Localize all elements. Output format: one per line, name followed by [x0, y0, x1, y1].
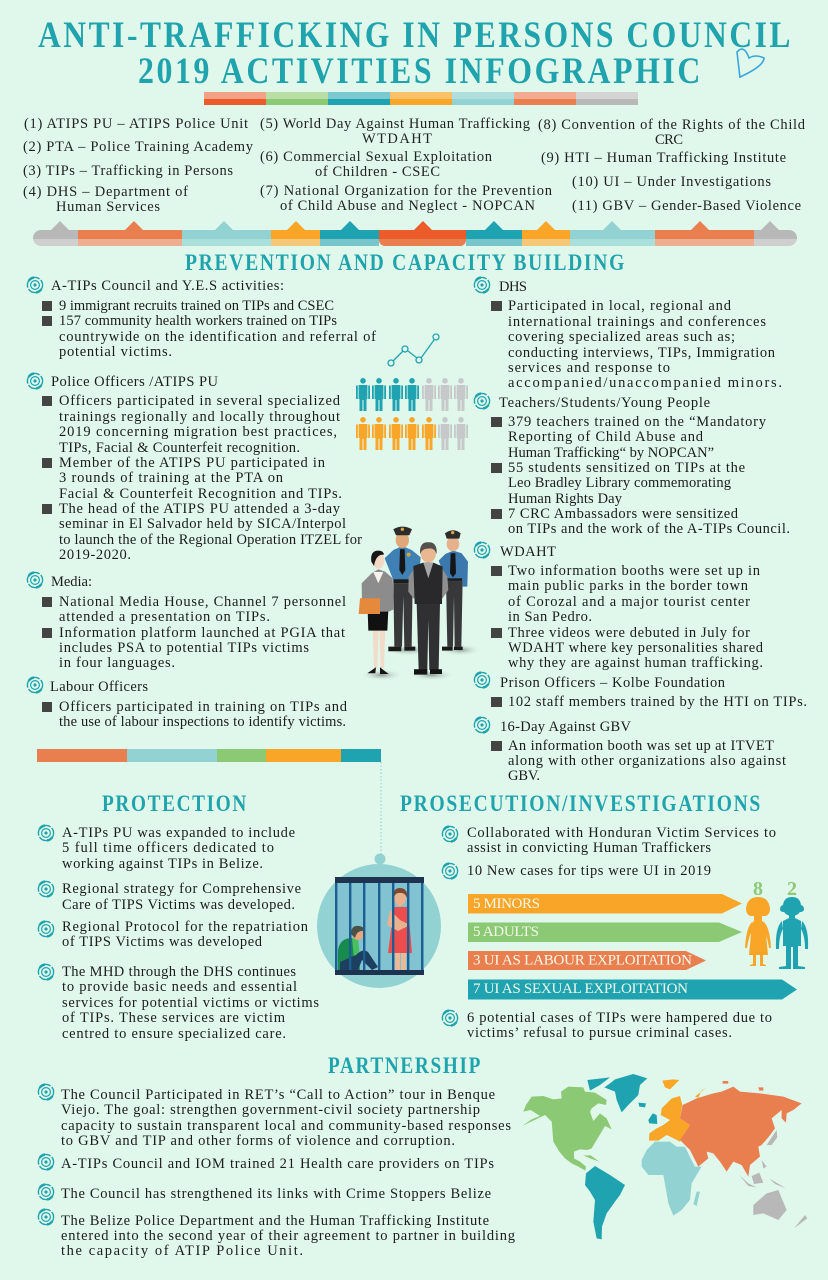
- block: WDAHT: Three videos were debuted in July for: [508, 625, 750, 641]
- arrow: 5 adults: 5 ADULTS: [473, 924, 539, 940]
- block: WDAHT: main public parks in the border town: [508, 578, 749, 594]
- asia: [680, 1081, 802, 1177]
- arrow: 5 adults: [468, 922, 742, 942]
- panel: prosecution/investigations: [442, 825, 808, 1041]
- block: Police Officers: Facial & Counterfeit Recognition and TIPs.: [59, 486, 342, 502]
- officer right: [446, 580, 463, 647]
- panel: partnership: the capacity of ATIP Police Unit.: [61, 1243, 303, 1259]
- panel: prosecution/investigations: assist in convicting Human Traffickers: [467, 840, 711, 856]
- block: Labour Officers: Labour Officers: [50, 679, 148, 695]
- sitting boy: [338, 938, 360, 970]
- block: Police Officers: 2019-2020.: [59, 547, 131, 563]
- panel: prosecution/investigations: Collaborated with Honduran Victim Services to: [467, 825, 776, 841]
- panel: protection: [38, 825, 319, 1042]
- world map: [522, 1074, 807, 1239]
- panel: prevention right column: [474, 277, 807, 784]
- title colour bar: [204, 92, 638, 105]
- block: 16-Day Against GBV: 16-Day Against GBV: [500, 719, 632, 735]
- panel: protection: Regional Protocol for the repatriation: [62, 919, 309, 935]
- panel: partnership: entered into the second year of their agreement to partner in building: [61, 1228, 515, 1244]
- block: Media: includes PSA to potential TIPs victims: [59, 640, 309, 656]
- block: Police Officers: 2019 concerning migration best practices,: [59, 424, 337, 440]
- africa: [642, 1142, 702, 1216]
- panel: partnership: The Council Participated in RET’s “Call to Action” tour in Benque: [61, 1087, 495, 1103]
- cage: [335, 882, 423, 970]
- abbreviations list: of Children - CSEC: [315, 164, 440, 180]
- abbreviations list: of Child Abuse and Neglect - NOPCAN: [280, 198, 536, 214]
- block: Labour Officers: [27, 677, 348, 730]
- europe: [649, 1079, 707, 1142]
- block: 16-Day Against GBV: [474, 717, 786, 784]
- panel: protection: services for potential victims or victims: [62, 995, 319, 1011]
- block: Prison Officers: [474, 672, 807, 710]
- block: Media: attended a presentation on TIPs.: [59, 609, 270, 625]
- block: A-TIPs Council: 9 immigrant recruits trained on TIPs and CSEC: [59, 298, 334, 314]
- abbreviations list: WTDAHT: [362, 131, 432, 147]
- panel: protection: centred to ensure specialized care.: [62, 1026, 286, 1042]
- standing woman: [395, 950, 406, 970]
- heading: partnership: PARTNERSHIP: [328, 1053, 482, 1078]
- block: Police Officers: Police Officers /ATIPS PU: [51, 374, 219, 390]
- block: Teachers/Students/Young People: on TIPs and the work of the A-TIPs Council.: [508, 521, 790, 537]
- panel: partnership: Viejo. The goal: strengthen government-civil society partnership: [61, 1102, 480, 1118]
- block: Teachers/Students/Young People: 379 teachers trained on the “Mandatory: [508, 414, 767, 430]
- block: 16-Day Against GBV: along with other organizations also against: [508, 753, 786, 769]
- abbreviations list: (10) UI – Under Investigations: [572, 174, 771, 190]
- man centre: [417, 603, 440, 670]
- panel: prosecution/investigations: 6 potential cases of TIPs were hampered due to: [467, 1010, 772, 1026]
- block: WDAHT: Two information booths were set up in: [508, 563, 761, 579]
- panel: protection: 5 full time officers dedicated to: [62, 840, 274, 856]
- title: [38, 15, 793, 92]
- block: Teachers/Students/Young People: [474, 393, 790, 537]
- panel: protection: of TIPS Victims was developed: [62, 934, 263, 950]
- panel: prosecution/investigations: victims’ refusal to pursue criminal cases.: [467, 1025, 732, 1041]
- illustration: people behind bars: [317, 854, 441, 988]
- block: Media: National Media House, Channel 7 personnel: [59, 594, 346, 610]
- panel: partnership: capacity to sustain transparent local and community-based responses: [61, 1118, 511, 1134]
- heading: protection: PROTECTION: [102, 791, 248, 816]
- block: Labour Officers: the use of labour inspections to identify victims.: [59, 714, 346, 730]
- block: WDAHT: of Corozal and a major tourist center: [508, 594, 750, 610]
- abbreviations list: (6) Commercial Sexual Exploitation: [260, 149, 493, 165]
- icon: boy: [776, 897, 808, 969]
- block: Media: [27, 572, 346, 671]
- panel: partnership: The Belize Police Department and the Human Trafficking Institute: [61, 1213, 489, 1229]
- block: DHS: accompanied/unaccompanied minors.: [508, 375, 782, 391]
- block: A-TIPs Council: [27, 277, 376, 360]
- greenland, baffin, iceland, uk: [587, 1074, 657, 1124]
- block: Media: in four languages.: [59, 655, 175, 671]
- woman: [373, 628, 385, 668]
- panel: protection: to provide basic needs and essential: [62, 979, 297, 995]
- arrow: 3 UI as labour exploitation: 3 UI AS LABOUR EXPLOITATION: [473, 952, 692, 968]
- block: DHS: [474, 277, 782, 391]
- arrow: 7 UI as sexual exploitation: 7 UI AS SEXUAL EXPLOITATION: [473, 981, 688, 997]
- icon: girl: [745, 897, 771, 966]
- block: 16-Day Against GBV: GBV.: [508, 768, 540, 784]
- illustration: police officers and civilians: [359, 527, 482, 681]
- block: Media: Media:: [51, 574, 92, 590]
- block: Labour Officers: Officers participated in training on TIPs and: [59, 699, 348, 715]
- abbreviations list: CRC: [655, 132, 683, 148]
- block: DHS: covering specialized areas such as;: [508, 329, 735, 345]
- block: DHS: international trainings and conferences: [508, 314, 766, 330]
- icon: heart doodle: [737, 49, 764, 78]
- abbreviations list: (7) National Organization for the Prevention: [260, 183, 553, 199]
- south america: [585, 1166, 625, 1239]
- heading: prevention and capacity building: PREVENTION AND CAPACITY BUILDING: [185, 250, 626, 275]
- decorative colour bar: section divider: [37, 749, 381, 762]
- block: A-TIPs Council: 157 community health workers trained on TIPs: [59, 313, 337, 329]
- block: Teachers/Students/Young People: Human Trafficking“ by NOPCAN”: [508, 445, 714, 461]
- block: Teachers/Students/Young People: Reporting of Child Abuse and: [508, 429, 704, 445]
- officer left: [393, 583, 413, 647]
- number: 2: 2: [787, 878, 797, 900]
- block: Police Officers: Officers participated in several specialized: [59, 393, 341, 409]
- block: Police Officers: trainings regionally and locally throughout: [59, 409, 340, 425]
- panel: protection: A-TIPs PU was expanded to include: [62, 825, 295, 841]
- block: WDAHT: in San Pedro.: [508, 609, 592, 625]
- north america: [522, 1087, 612, 1171]
- block: WDAHT: WDAHT where key personalities shared: [508, 640, 764, 656]
- panel: partnership: [38, 1084, 515, 1259]
- block: Police Officers: to launch the of the Regional Operation ITZEL for: [59, 532, 362, 548]
- block: A-TIPs Council: potential victims.: [59, 344, 172, 360]
- block: DHS: DHS: [499, 279, 527, 295]
- panel: protection: working against TIPs in Belize.: [62, 856, 263, 872]
- block: Teachers/Students/Young People: Human Rights Day: [508, 491, 623, 507]
- panel: protection: Regional strategy for Comprehensive: [62, 881, 301, 897]
- block: A-TIPs Council: countrywide on the identification and referral of: [59, 329, 376, 345]
- panel: partnership: to GBV and TIP and other forms of violence and corruption.: [61, 1133, 455, 1149]
- abbreviations list: (9) HTI – Human Trafficking Institute: [541, 150, 786, 166]
- title: 2019 ACTIVITIES INFOGRAPHIC: [138, 51, 703, 92]
- block: DHS: services and response to: [508, 360, 670, 376]
- block: WDAHT: why they are against human trafficking.: [508, 655, 763, 671]
- abbreviations list: (4) DHS – Department of: [23, 184, 188, 200]
- block: Teachers/Students/Young People: 7 CRC Ambassadors were sensitized: [508, 506, 739, 522]
- panel: partnership: The Council has strengthened its links with Crime Stoppers Belize: [61, 1186, 491, 1202]
- abbreviations list: (3) TIPs – Trafficking in Persons: [23, 163, 233, 179]
- block: Prison Officers: 102 staff members trained by the HTI on TIPs.: [508, 694, 807, 710]
- block: Police Officers: 3 rounds of training at the PTA on: [59, 470, 284, 486]
- block: Police Officers: The head of the ATIPS PU attended a 3-day: [59, 501, 341, 517]
- panel: protection: of TIPs. These services are victim: [62, 1010, 286, 1026]
- block: Prison Officers: Prison Officers – Kolbe Foundation: [500, 675, 726, 691]
- block: Media: Information platform launched at PGIA that: [59, 625, 345, 641]
- block: DHS: conducting interviews, TIPs, Immigration: [508, 345, 776, 361]
- block: Police Officers: TIPs, Facial & Counterfeit recognition.: [59, 440, 300, 456]
- block: Police Officers: Member of the ATIPS PU participated in: [59, 455, 326, 471]
- block: Police Officers: [27, 373, 362, 563]
- abbreviations list: Human Services: [56, 199, 160, 215]
- arrow: 7 UI as sexual exploitation: [468, 980, 797, 1000]
- panel: protection: Care of TIPS Victims was developed.: [62, 897, 295, 913]
- block: DHS: Participated in local, regional and: [508, 298, 732, 314]
- abbreviations list: (2) PTA – Police Training Academy: [23, 139, 254, 155]
- abbreviations list: [23, 116, 806, 215]
- block: WDAHT: WDAHT: [500, 544, 556, 560]
- timeline bar: [33, 221, 797, 246]
- panel: protection: The MHD through the DHS continues: [62, 964, 296, 980]
- block: Teachers/Students/Young People: 55 students sensitized on TIPs at the: [508, 460, 745, 476]
- shadows: [383, 644, 433, 656]
- abbreviations list: (1) ATIPS PU – ATIPS Police Unit: [24, 116, 248, 132]
- arrow: 5 minors: 5 MINORS: [473, 896, 540, 912]
- panel: prevention left column: [27, 277, 376, 730]
- block: A-TIPs Council: A-TIPs Council and Y.E.S activities:: [51, 278, 284, 294]
- panel: partnership: A-TIPs Council and IOM trained 21 Health care providers on TIPs: [61, 1156, 494, 1172]
- abbreviations list: (11) GBV – Gender-Based Violence: [572, 198, 801, 214]
- australia and southeast asia: [739, 1130, 807, 1228]
- block: Police Officers: seminar in El Salvador held by SICA/Interpol: [59, 516, 346, 532]
- abbreviations list: (8) Convention of the Rights of the Child: [538, 117, 806, 133]
- block: Teachers/Students/Young People: Leo Bradley Library commemorating: [508, 475, 731, 491]
- arrow: 5 minors: [468, 894, 742, 914]
- number: 8: 8: [753, 878, 763, 900]
- block: WDAHT: [474, 542, 764, 671]
- block: 16-Day Against GBV: An information booth was set up at ITVET: [508, 738, 774, 754]
- block: Teachers/Students/Young People: Teachers/Students/Young People: [499, 395, 710, 411]
- abbreviations list: (5) World Day Against Human Trafficking: [260, 116, 530, 132]
- pictogram: people statistics: [356, 378, 468, 450]
- icon: line chart: [388, 334, 439, 366]
- heading: prosecution/investigations: PROSECUTION/INVESTIGATIONS: [400, 791, 762, 816]
- panel: prosecution/investigations: 10 New cases for tips were UI in 2019: [467, 863, 711, 879]
